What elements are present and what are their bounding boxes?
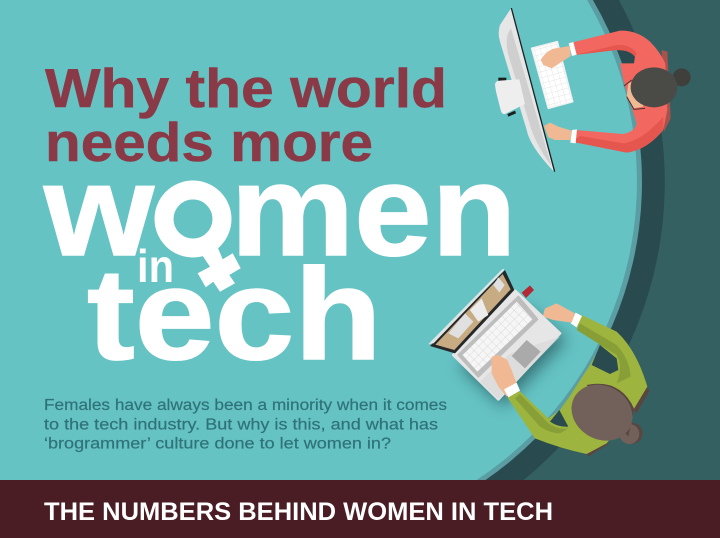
banner: numbers behind women in tech: THE NUMBERS BEHIND WOMEN IN TECH: [44, 498, 553, 526]
laptop: [430, 269, 560, 399]
keyboard: [532, 42, 573, 108]
sweater body and arms: [572, 31, 667, 153]
laptop screen: [430, 270, 514, 353]
title: tech: tech: [87, 242, 382, 387]
hands: [541, 46, 571, 68]
head and hair: [561, 374, 643, 452]
cuffs: [571, 313, 582, 327]
title: why the world needs more: Why the world: [45, 57, 447, 119]
cuffs: [569, 42, 577, 56]
title: women: men: [230, 137, 516, 283]
intro paragraph: [44, 397, 447, 452]
hand on keyboard: [492, 355, 517, 397]
title: in: in: [137, 240, 174, 292]
sweater body and arms: [507, 315, 647, 454]
intro paragraph: to the tech industry. But why is this, and what has: [44, 416, 438, 434]
title: why the world needs more: [45, 57, 447, 173]
chair: [586, 387, 650, 457]
title: women: w: [43, 137, 154, 283]
monitor: [495, 8, 555, 172]
title: women: [43, 136, 516, 292]
illustration: woman at desktop computer: [495, 8, 691, 172]
intro paragraph: Females have always been a minority when it comes: [44, 397, 447, 414]
intro paragraph: ‘brogrammer’ culture done to let women in?: [44, 436, 391, 452]
USB stick: [522, 285, 534, 298]
banner: numbers behind women in tech: [0, 480, 720, 538]
illustration: woman at laptop: [430, 269, 650, 457]
chair: [662, 50, 671, 132]
icon: female symbol as letter o: o: [160, 136, 227, 281]
laptop shadow: [460, 307, 567, 407]
head and hair: [624, 67, 691, 109]
hand: [543, 303, 575, 323]
title: why the world needs more: needs more: [45, 111, 373, 173]
